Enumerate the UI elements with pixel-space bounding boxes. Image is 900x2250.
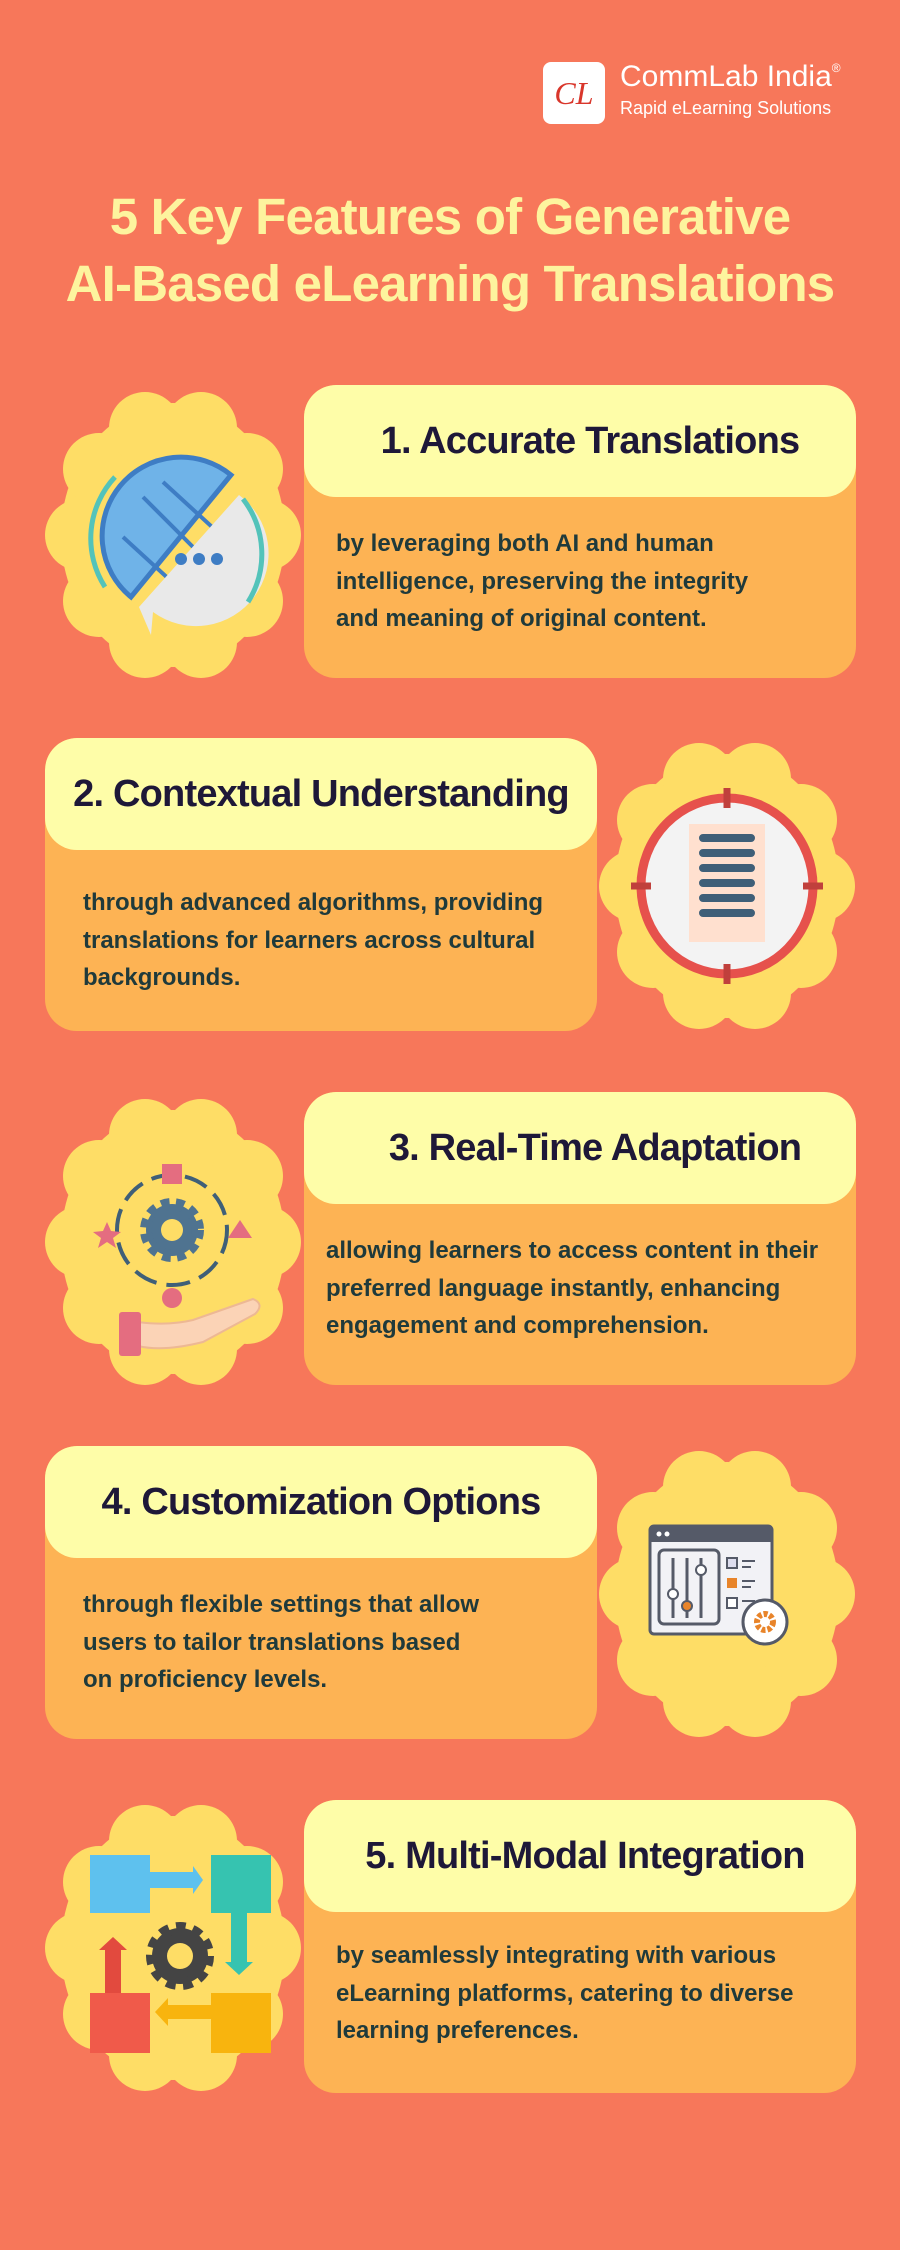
heading 2: 2. Contextual Understanding	[73, 772, 569, 814]
panel 2	[45, 738, 855, 1031]
panel 3	[45, 1092, 856, 1385]
body 4: through flexible settings that allow	[83, 1591, 479, 1618]
heading 4: 4. Customization Options	[102, 1480, 540, 1522]
logo icon: CL	[554, 74, 594, 110]
logo text: CommLab India®	[620, 60, 841, 93]
body 3: preferred language instantly, enhancing	[326, 1274, 780, 1302]
body 4	[83, 1591, 480, 1693]
heading 4	[45, 1446, 597, 1558]
body 1	[336, 530, 748, 632]
body 2	[83, 889, 543, 991]
body 2: translations for learners across cultural	[83, 926, 535, 954]
body 2: backgrounds.	[83, 964, 240, 991]
icon: gear in hand	[45, 1099, 301, 1385]
body 1: intelligence, preserving the integrity	[336, 568, 748, 594]
body 1: and meaning of original content.	[336, 605, 707, 632]
body 5: eLearning platforms, catering to diverse	[336, 1980, 793, 2006]
heading 5	[304, 1800, 856, 1912]
card 4	[45, 1446, 597, 1739]
heading 1	[304, 385, 856, 497]
title	[66, 188, 834, 312]
body 5: learning preferences.	[336, 2017, 579, 2044]
heading 3	[304, 1092, 856, 1204]
title: AI-Based eLearning Translations	[66, 255, 834, 312]
body 4: users to tailor translations based	[83, 1628, 460, 1656]
card 5	[304, 1800, 856, 2093]
panel 5	[45, 1800, 856, 2093]
logo icon	[543, 62, 605, 124]
card 1	[304, 385, 856, 678]
body 4: on proficiency levels.	[83, 1666, 327, 1693]
logo	[543, 60, 841, 124]
title: 5 Key Features of Generative	[110, 188, 790, 245]
body 5	[336, 1942, 793, 2044]
body 5: by seamlessly integrating with various	[336, 1942, 776, 1969]
heading 1: 1. Accurate Translations	[381, 420, 799, 462]
body 2: through advanced algorithms, providing	[83, 889, 543, 916]
logo tagline: Rapid eLearning Solutions	[620, 98, 831, 118]
card 3	[304, 1092, 856, 1385]
body 3	[326, 1237, 818, 1339]
icon: puzzle integration	[45, 1805, 301, 2091]
heading 3: 3. Real-Time Adaptation	[389, 1126, 801, 1168]
icon: document target	[599, 743, 855, 1029]
body 3: allowing learners to access content in their	[326, 1237, 818, 1264]
icon: settings window	[599, 1451, 855, 1737]
panel 4	[45, 1446, 855, 1739]
heading 5: 5. Multi-Modal Integration	[365, 1834, 805, 1876]
heading 2	[45, 738, 597, 850]
card 2	[45, 738, 597, 1031]
body 1: by leveraging both AI and human	[336, 530, 714, 557]
body 3: engagement and comprehension.	[326, 1312, 709, 1339]
panel 1	[45, 385, 856, 678]
icon: globe and speech bubble	[45, 392, 301, 678]
